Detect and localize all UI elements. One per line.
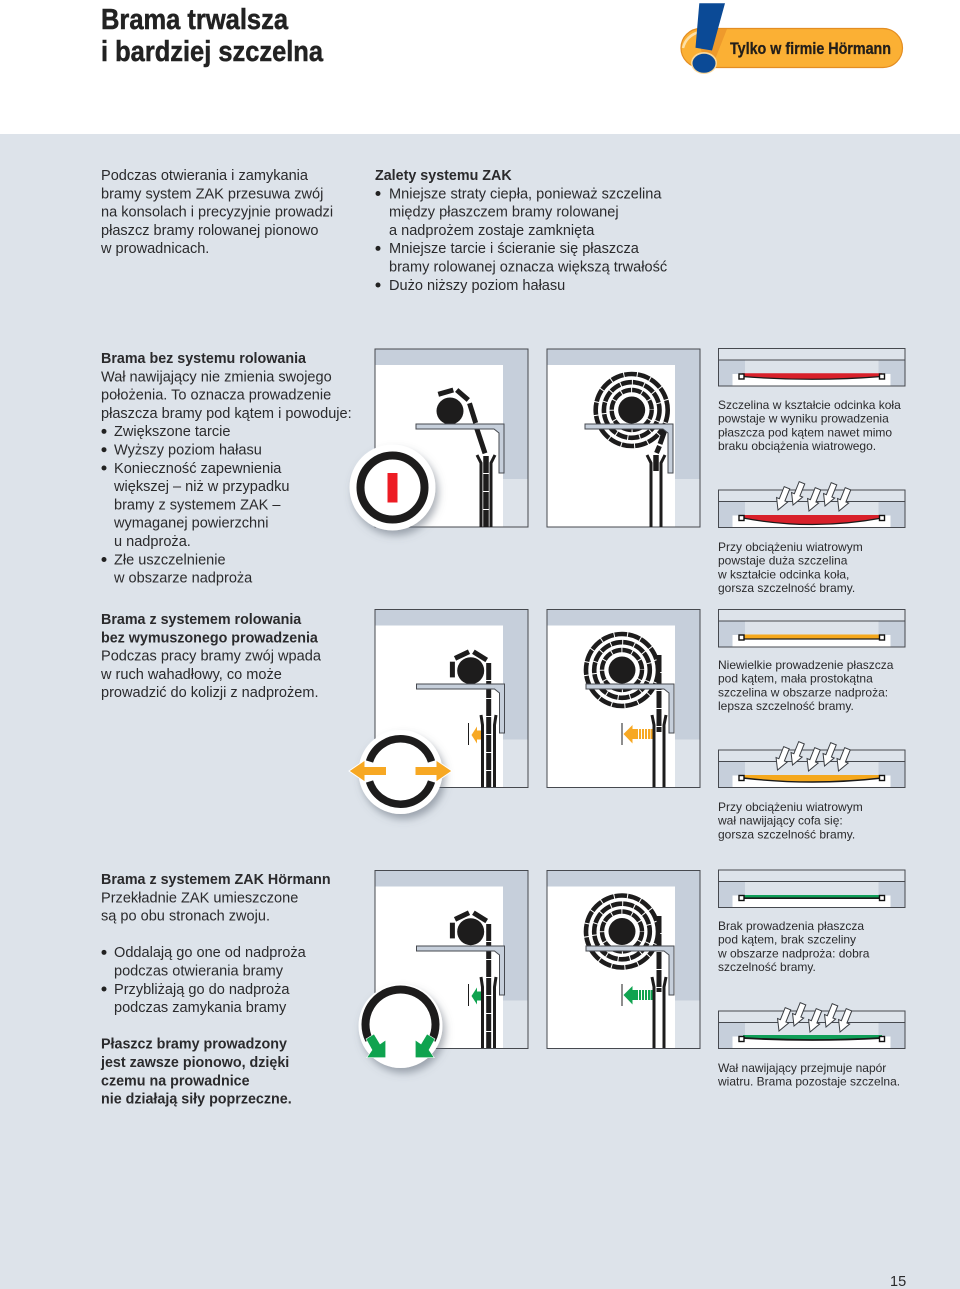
text block: door without rolling system: w obszarze nadproża bbox=[113, 571, 253, 587]
intro text: Podczas otwierania i zamykania bbox=[101, 168, 309, 184]
logo badge: Tylko w firmie Hörmann bbox=[681, 3, 902, 74]
caption: circular gap: powstaje w wyniku prowadzenia bbox=[718, 412, 889, 426]
caption: no gap: w obszarze nadproża: dobra bbox=[717, 946, 870, 960]
text block: door without rolling system: Konieczność zapewnienia bbox=[114, 461, 282, 477]
advantages of the ZAK system: bramy rolowanej oznacza większą trwałość bbox=[389, 260, 667, 276]
advantages of the ZAK system bbox=[375, 168, 671, 294]
caption: wind load gap: gorsza szczelność bramy. bbox=[718, 581, 855, 595]
row 3 diagram: full coil with long green arrow bbox=[547, 870, 700, 1048]
text block: door without rolling system: wymaganej powierzchni bbox=[113, 516, 268, 532]
text block: door without rolling system bbox=[101, 351, 356, 587]
text block: rolling system without forced guidance: prowadzić do kolizji z nadprożem. bbox=[101, 685, 318, 701]
caption: wind load gap: Przy obciążeniu wiatrowym bbox=[718, 540, 863, 554]
caption: shaft moves back: Przy obciążeniu wiatrowym bbox=[718, 800, 863, 814]
row 1 diagram: fixed shaft, full coil bbox=[547, 349, 700, 527]
text block: door without rolling system: bramy z systemem ZAK – bbox=[114, 497, 281, 513]
text block: ZAK Hörmann system: Płaszcz bramy prowadzony bbox=[101, 1037, 287, 1053]
text block: ZAK Hörmann system: Brama z systemem ZAK Hörmann bbox=[101, 872, 331, 888]
text block: ZAK Hörmann system: są po obu stronach zwoju. bbox=[101, 909, 270, 925]
icon: angled guidance badge bbox=[350, 444, 436, 530]
text block: ZAK Hörmann system: Przekładnie ZAK umieszczone bbox=[101, 890, 298, 906]
text block: ZAK Hörmann system: Przybliżają go do nadproża bbox=[114, 982, 290, 998]
text block: door without rolling system: Wał nawijający nie zmienia swojego bbox=[101, 369, 332, 385]
caption: shaft absorbs wind pressure: wiatru. Brama pozostaje szczelna. bbox=[717, 1075, 900, 1089]
text block: ZAK Hörmann system: podczas otwierania bramy bbox=[114, 964, 284, 980]
intro text: płaszcz bramy rolowanej pionowo bbox=[101, 223, 319, 239]
caption: no gap: szczelność bramy. bbox=[718, 960, 816, 974]
advantages of the ZAK system: między płaszczem bramy rolowanej bbox=[389, 205, 619, 221]
text block: rolling system without forced guidance: bez wymuszonego prowadzenia bbox=[101, 630, 319, 646]
text block: rolling system without forced guidance: Podczas pracy bramy zwój wpada bbox=[101, 649, 322, 665]
text block: door without rolling system: płaszcza bramy pod kątem i powoduje: bbox=[101, 406, 352, 422]
caption: wind load gap: w kształcie odcinka koła, bbox=[717, 567, 849, 581]
text block: ZAK Hörmann system: jest zawsze pionowo, dzięki bbox=[100, 1055, 289, 1071]
title: Brama trwalsza bbox=[101, 4, 289, 36]
row 2 diagram: small coil with small amber arrow bbox=[375, 610, 528, 788]
icon: pendulum movement badge with amber arrows bbox=[349, 730, 452, 814]
small diagram: no gap bbox=[718, 870, 905, 908]
text block: ZAK Hörmann system: czemu na prowadnice bbox=[101, 1073, 250, 1089]
text block: rolling system without forced guidance: Brama z systemem rolowania bbox=[101, 612, 302, 628]
row 1 diagram: fixed shaft, small coil bbox=[375, 349, 528, 527]
row 2 diagram: full coil with long amber arrow bbox=[547, 610, 700, 788]
text block: door without rolling system: Zwiększone tarcie bbox=[114, 424, 230, 440]
text block: door without rolling system: Złe uszczelnienie bbox=[114, 552, 226, 568]
text block: door without rolling system: u nadproża. bbox=[114, 534, 191, 550]
caption: small rectangular gap: pod kątem, mała prostokątna bbox=[718, 672, 873, 686]
text block: ZAK Hörmann system: Oddalają go one od nadproża bbox=[114, 945, 307, 961]
text block: door without rolling system: Brama bez systemu rolowania bbox=[101, 351, 307, 367]
logo badge: Tylko w firmie Hörmann: Tylko w firmie Hörmann bbox=[730, 39, 891, 58]
text block: door without rolling system: położenia. To oznacza prowadzenie bbox=[101, 388, 331, 404]
caption: small rectangular gap: szczelina w obszarze nadproża: bbox=[718, 685, 888, 699]
small diagram: shaft absorbs wind pressure bbox=[718, 1001, 905, 1048]
caption: wind load gap: powstaje duża szczelina bbox=[718, 554, 848, 568]
caption: shaft moves back: gorsza szczelność bramy. bbox=[718, 827, 855, 841]
intro text: w prowadnicach. bbox=[100, 241, 209, 257]
intro text: bramy system ZAK przesuwa zwój bbox=[101, 186, 323, 202]
advantages of the ZAK system: a nadprożem zostaje zamknięta bbox=[389, 223, 595, 239]
text block: rolling system without forced guidance: w ruch wahadłowy, co może bbox=[100, 667, 282, 683]
advantages of the ZAK system: Zalety systemu ZAK bbox=[375, 168, 512, 184]
small diagram: large gap under wind load bbox=[718, 480, 905, 528]
row 3 diagram: small coil with small green arrow bbox=[375, 870, 528, 1048]
text block: ZAK Hörmann system: nie działają siły poprzeczne. bbox=[101, 1092, 292, 1108]
small diagram: circular gap, no wind bbox=[718, 348, 905, 386]
text block: door without rolling system: Wyższy poziom hałasu bbox=[114, 442, 262, 458]
small diagram: shaft moves back under wind bbox=[718, 740, 905, 788]
advantages of the ZAK system: Mniejsze straty ciepła, ponieważ szczelina bbox=[389, 186, 662, 202]
icon: ZAK badge with green arrows bbox=[358, 984, 442, 1068]
caption: no gap: pod kątem, brak szczeliny bbox=[718, 933, 856, 947]
caption: circular gap: Szczelina w kształcie odcinka koła bbox=[718, 398, 901, 412]
caption: no gap: Brak prowadzenia płaszcza bbox=[718, 919, 864, 933]
title bbox=[101, 4, 324, 68]
caption: circular gap: braku obciążenia wiatrowego. bbox=[718, 439, 876, 453]
caption: circular gap: płaszcza pod kątem nawet mimo bbox=[718, 425, 892, 439]
caption: shaft moves back: wał nawijający cofa się: bbox=[717, 814, 843, 828]
caption: small rectangular gap: Niewielkie prowadzenie płaszcza bbox=[718, 658, 894, 672]
text block: ZAK Hörmann system: podczas zamykania bramy bbox=[114, 1000, 287, 1016]
intro text: na konsolach i precyzyjnie prowadzi bbox=[101, 205, 333, 221]
caption: small rectangular gap: lepsza szczelność bramy. bbox=[718, 699, 854, 713]
text block: ZAK Hörmann system bbox=[100, 872, 335, 1108]
caption: shaft absorbs wind pressure: Wał nawijający przejmuje napór bbox=[718, 1061, 886, 1075]
small diagram: small rectangular gap bbox=[718, 610, 905, 647]
advantages of the ZAK system: Mniejsze tarcie i ścieranie się płaszcza bbox=[389, 241, 640, 257]
text block: door without rolling system: większej – niż w przypadku bbox=[113, 479, 289, 495]
title: i bardziej szczelna bbox=[101, 36, 324, 68]
advantages of the ZAK system: Dużo niższy poziom hałasu bbox=[389, 278, 565, 294]
